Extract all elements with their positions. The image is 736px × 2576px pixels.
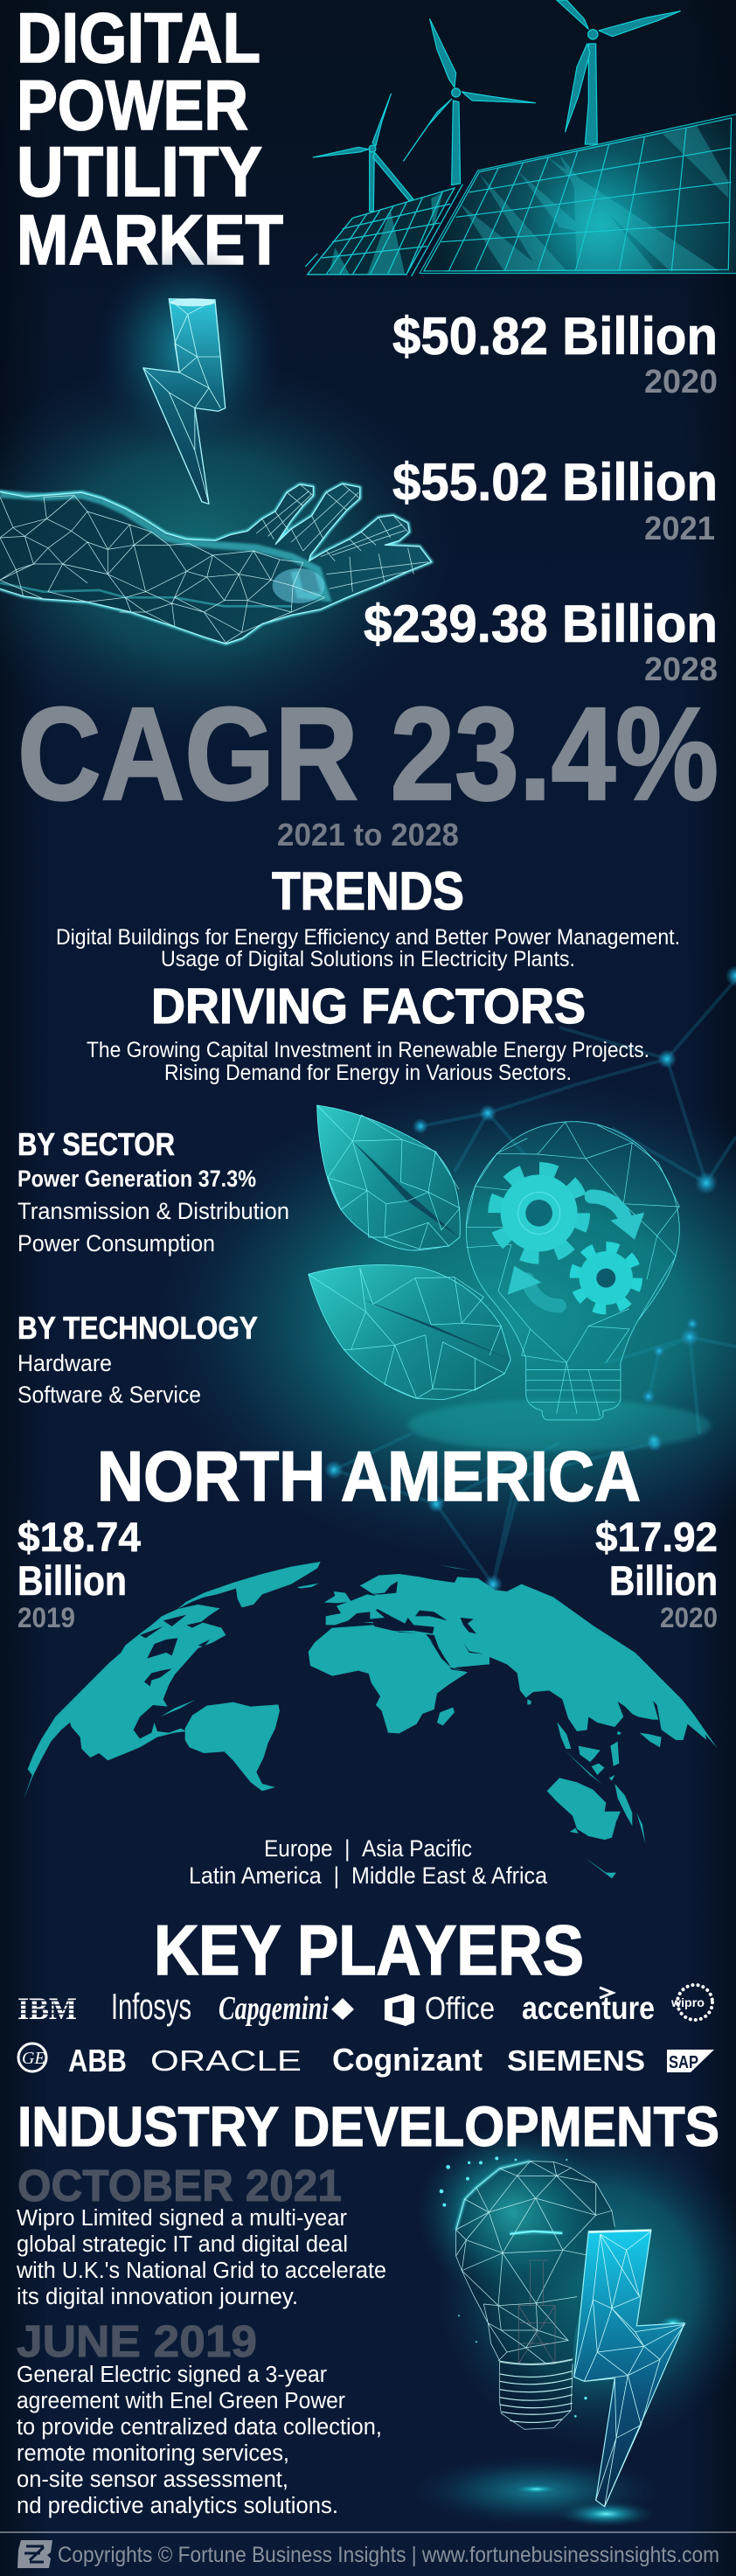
hand illustration	[0, 484, 431, 644]
by technology	[17, 1310, 258, 1408]
market value: 2028: 2028	[644, 651, 718, 688]
logo: GE	[18, 2043, 46, 2071]
by technology: Hardware	[17, 1350, 112, 1376]
market value: 2028: $239.38 Billion	[364, 595, 718, 653]
by sector: Transmission & Distribution	[17, 1198, 289, 1224]
logo: wipro: wipro	[670, 1995, 705, 2009]
market value: 2020: $50.82 Billion	[392, 307, 718, 366]
by sector: Power Consumption	[17, 1230, 215, 1257]
title	[17, 0, 283, 280]
north america value 2020	[595, 1514, 718, 1633]
key players heading: KEY PLAYERS	[154, 1911, 584, 1990]
north america value 2019: 2019	[17, 1602, 75, 1633]
logo: ABB: ABB	[68, 2043, 127, 2078]
by technology: Software & Service	[17, 1382, 201, 1408]
logo: wipro	[670, 1985, 712, 2020]
title: POWER	[17, 66, 248, 145]
world map globe	[24, 1562, 718, 1878]
top leaf	[317, 1105, 460, 1250]
logo: Cognizant: Cognizant	[332, 2042, 483, 2078]
illustration: glowing bulb with lightning bolt	[411, 2122, 736, 2527]
north america value 2019: Billion	[17, 1557, 127, 1604]
glows	[411, 2122, 736, 2527]
by sector	[17, 1126, 289, 1257]
development: October 2021: OCTOBER 2021	[17, 2161, 342, 2210]
illustration: wind turbines and solar panels	[305, 0, 736, 276]
trends: Usage of Digital Solutions in Electricity Plants.	[161, 947, 575, 971]
title: MARKET	[17, 201, 283, 280]
trends	[56, 861, 680, 971]
driving factors: Rising Demand for Energy in Various Sectors.	[164, 1061, 572, 1085]
lightning bolt over hand	[143, 298, 226, 504]
development: June 2019: to provide centralized data collection,	[17, 2415, 382, 2440]
market value: 2020: 2020	[644, 364, 718, 400]
title: UTILITY	[17, 133, 262, 212]
gear light bulb outline	[466, 1122, 679, 1420]
bolt	[574, 2230, 691, 2507]
other regions list: Europe | Asia Pacific	[264, 1835, 472, 1862]
development: June 2019: agreement with Enel Green Power	[17, 2389, 345, 2413]
other regions list	[189, 1835, 548, 1889]
north america value 2020: $17.92	[595, 1514, 718, 1560]
footer logo	[17, 2540, 52, 2568]
rotation arrows icon	[508, 1196, 644, 1305]
north america heading: NORTH AMERICA	[97, 1438, 641, 1516]
market value: 2021: $55.02 Billion	[392, 453, 718, 512]
south east asia, australia and oceania	[547, 1722, 662, 1878]
north america value 2019: $18.74	[17, 1514, 141, 1560]
driving factors: DRIVING FACTORS	[151, 978, 586, 1034]
north america value 2020: Billion	[609, 1557, 718, 1604]
development: June 2019: JUNE 2019	[17, 2316, 257, 2366]
glow behind leaves illustration	[140, 1067, 736, 1574]
logo: Capgemini: Capgemini	[219, 1990, 329, 2027]
africa and eurasia	[309, 1565, 718, 1748]
right solar panel	[420, 115, 736, 274]
development: June 2019: nd predictive analytics solutions.	[17, 2494, 338, 2518]
bottom leaf	[309, 1265, 510, 1400]
other regions list: Latin America | Middle East & Africa	[189, 1862, 548, 1889]
background network of glowing nodes	[324, 965, 736, 1594]
logo: GE: GE	[22, 2049, 45, 2068]
company logos	[16, 1985, 714, 2078]
development: October 2021	[16, 2161, 386, 2309]
development: June 2019: remote monitoring services,	[17, 2441, 289, 2466]
development: June 2019: General Electric signed a 3-year	[17, 2363, 327, 2387]
bulb	[456, 2162, 614, 2429]
trends: TRENDS	[272, 861, 464, 921]
development: June 2019	[17, 2316, 382, 2518]
light pool under bulb	[408, 1399, 711, 1452]
title: DIGITAL	[17, 0, 260, 78]
CAGR period: 2021 to 2028	[277, 817, 459, 853]
driving factors: The Growing Capital Investment in Renewable Energy Projects.	[87, 1038, 649, 1062]
development: October 2021: global strategic IT and digital deal	[17, 2232, 348, 2257]
logo: Siemens: SIEMENS	[507, 2044, 645, 2077]
glow around hand	[0, 245, 459, 752]
by sector: BY SECTOR	[17, 1126, 175, 1162]
gears icon	[496, 1169, 636, 1309]
trends: Digital Buildings for Energy Efficiency and Better Power Management.	[56, 925, 680, 950]
logo: IBM: IBM	[17, 1991, 77, 2026]
development: June 2019: on-site sensor assessment,	[17, 2468, 288, 2492]
market value: 2020	[392, 307, 718, 400]
market value: 2021: 2021	[644, 511, 715, 547]
logo: accenture: accenture	[522, 1990, 655, 2026]
logo: Oracle: ORACLE	[150, 2044, 302, 2077]
north america value 2020: 2020	[660, 1602, 718, 1633]
market value: 2021	[392, 453, 718, 547]
development: October 2021: with U.K.'s National Grid to accelerate	[16, 2259, 386, 2283]
left solar panel	[305, 184, 462, 276]
development: October 2021: Wipro Limited signed a multi-year	[17, 2206, 347, 2231]
logo: Office: Office	[425, 1990, 495, 2026]
market value: 2028	[364, 595, 718, 688]
driving factors	[87, 978, 649, 1085]
americas and greenland	[24, 1562, 321, 1800]
by sector: Power Generation 37.3%	[17, 1166, 256, 1192]
footer	[0, 2532, 736, 2568]
development: October 2021: its digital innovation journey.	[17, 2285, 298, 2309]
by technology: BY TECHNOLOGY	[17, 1310, 258, 1346]
illustration: leaves and gear bulb	[309, 1105, 711, 1452]
logo: SAP	[667, 2050, 714, 2072]
wind turbines	[313, 0, 680, 212]
logo: SAP: SAP	[669, 2053, 698, 2072]
logo: Infosys: Infosys	[111, 1986, 191, 2027]
sparkle dots	[440, 2156, 587, 2418]
north america value 2019	[17, 1514, 141, 1633]
logo: Office	[385, 1990, 495, 2026]
